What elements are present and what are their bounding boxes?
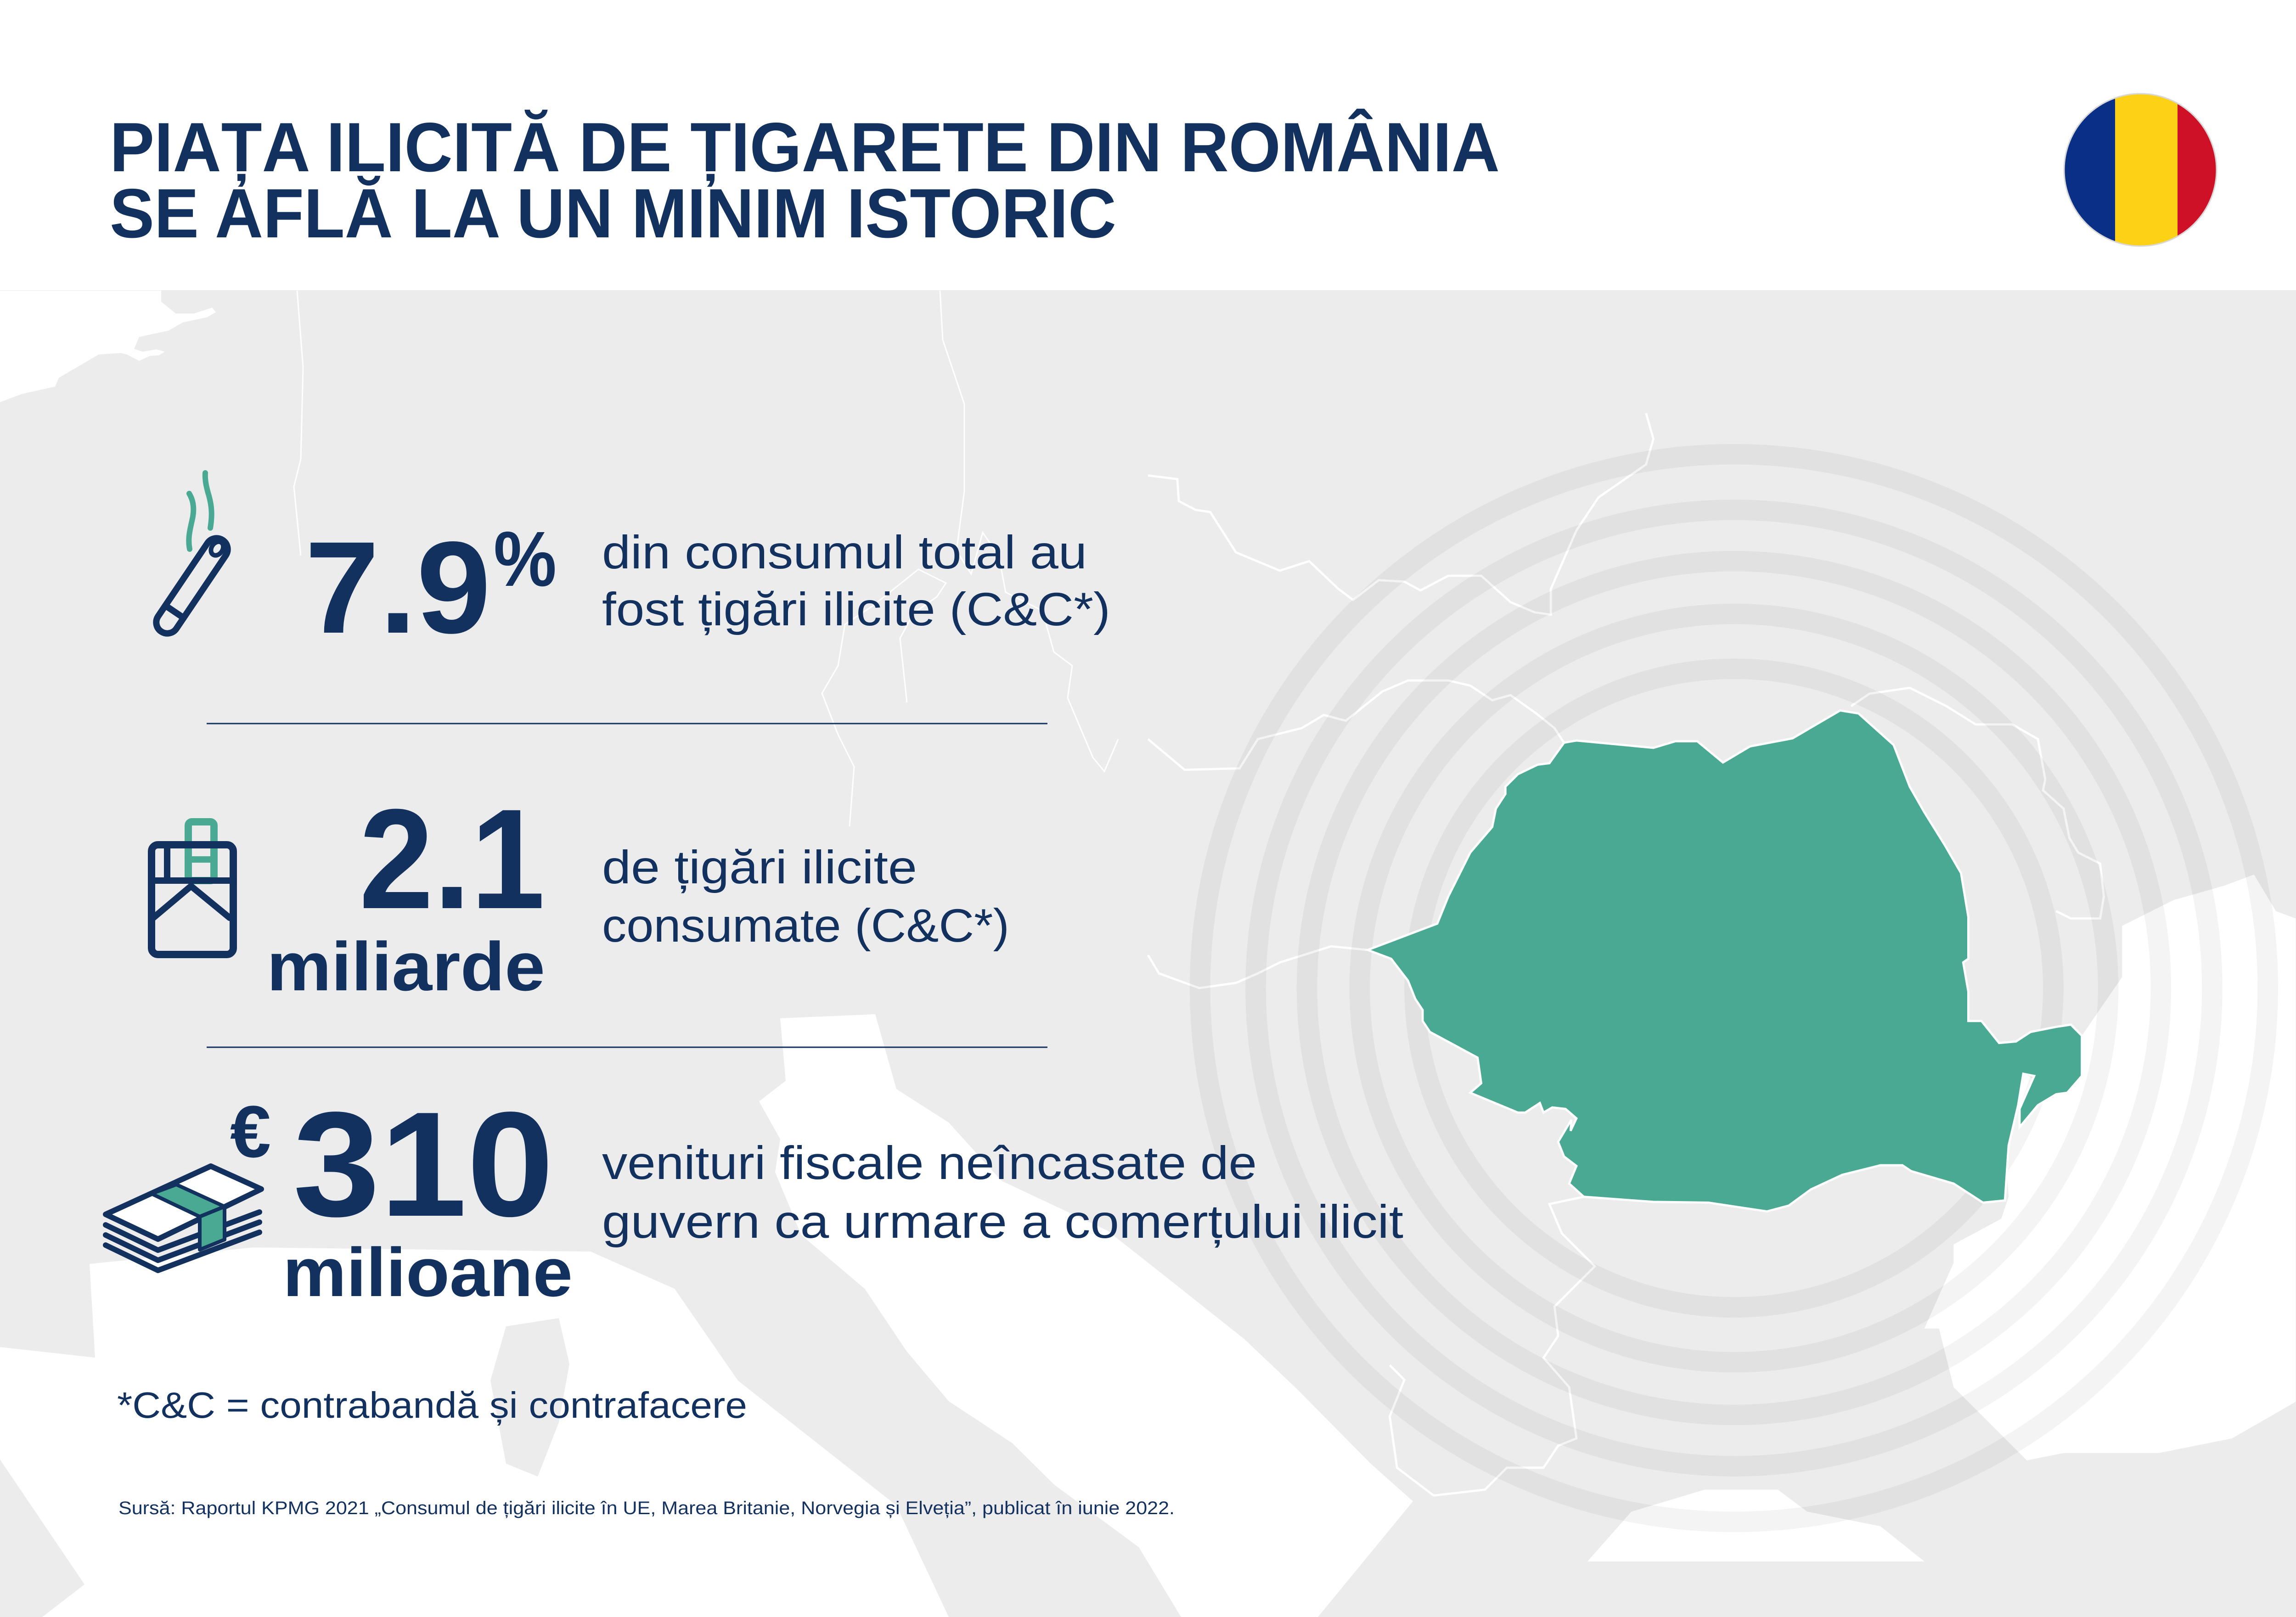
icon: romanian flag (2062, 92, 2219, 248)
number: 2.1 (359, 779, 545, 938)
number: € (230, 1090, 271, 1173)
description: venituri fiscale neîncasate de (602, 1137, 1257, 1189)
icon: cigarette pack (152, 822, 233, 954)
stat 1: 7.9%: % (494, 516, 557, 603)
icon: cigarette (152, 473, 232, 638)
source: Sursă: Raportul KPMG 2021 „Consumul de țigări ilicite în UE, Marea Britanie, Norvegia și Elveția”, publicat în iunie 2022. (118, 1498, 1175, 1518)
map: Romania (1367, 711, 2082, 1212)
description: de țigări ilicite (602, 841, 917, 893)
icon: money stack (106, 1166, 261, 1270)
concentric rings around Romania (1200, 454, 2268, 1522)
black sea and aegean (1148, 413, 2296, 1561)
number: 7.9 (305, 515, 491, 661)
stat 3: €310 milioane: milioane (283, 1234, 573, 1311)
title: PIAȚA ILICITĂ DE ȚIGARETE DIN ROMÂNIA (110, 108, 1500, 187)
stat 2: 2.1 miliarde: consumate (C&C*) (602, 899, 1009, 952)
title (110, 108, 1500, 253)
header band (0, 0, 2296, 290)
map border lines west (294, 291, 1118, 826)
stat 2: 2.1 miliarde: miliarde (267, 928, 545, 1005)
footnote: *C&C = contrabandă și contrafacere (117, 1385, 747, 1426)
stat 3: €310 milioane: 310 (293, 1081, 554, 1247)
stat 1: 7.9% (152, 473, 1110, 661)
title: SE AFLĂ LA UN MINIM ISTORIC (110, 174, 1116, 253)
stat 1: 7.9%: fost țigări ilicite (C&C*) (602, 583, 1110, 635)
stat 2: 2.1 miliarde (152, 779, 1009, 1005)
description: din consumul total au (602, 526, 1087, 578)
stat 3: €310 milioane (106, 1081, 1403, 1311)
stat 3: €310 milioane: guvern ca urmare a comerțului ilicit (602, 1196, 1403, 1248)
